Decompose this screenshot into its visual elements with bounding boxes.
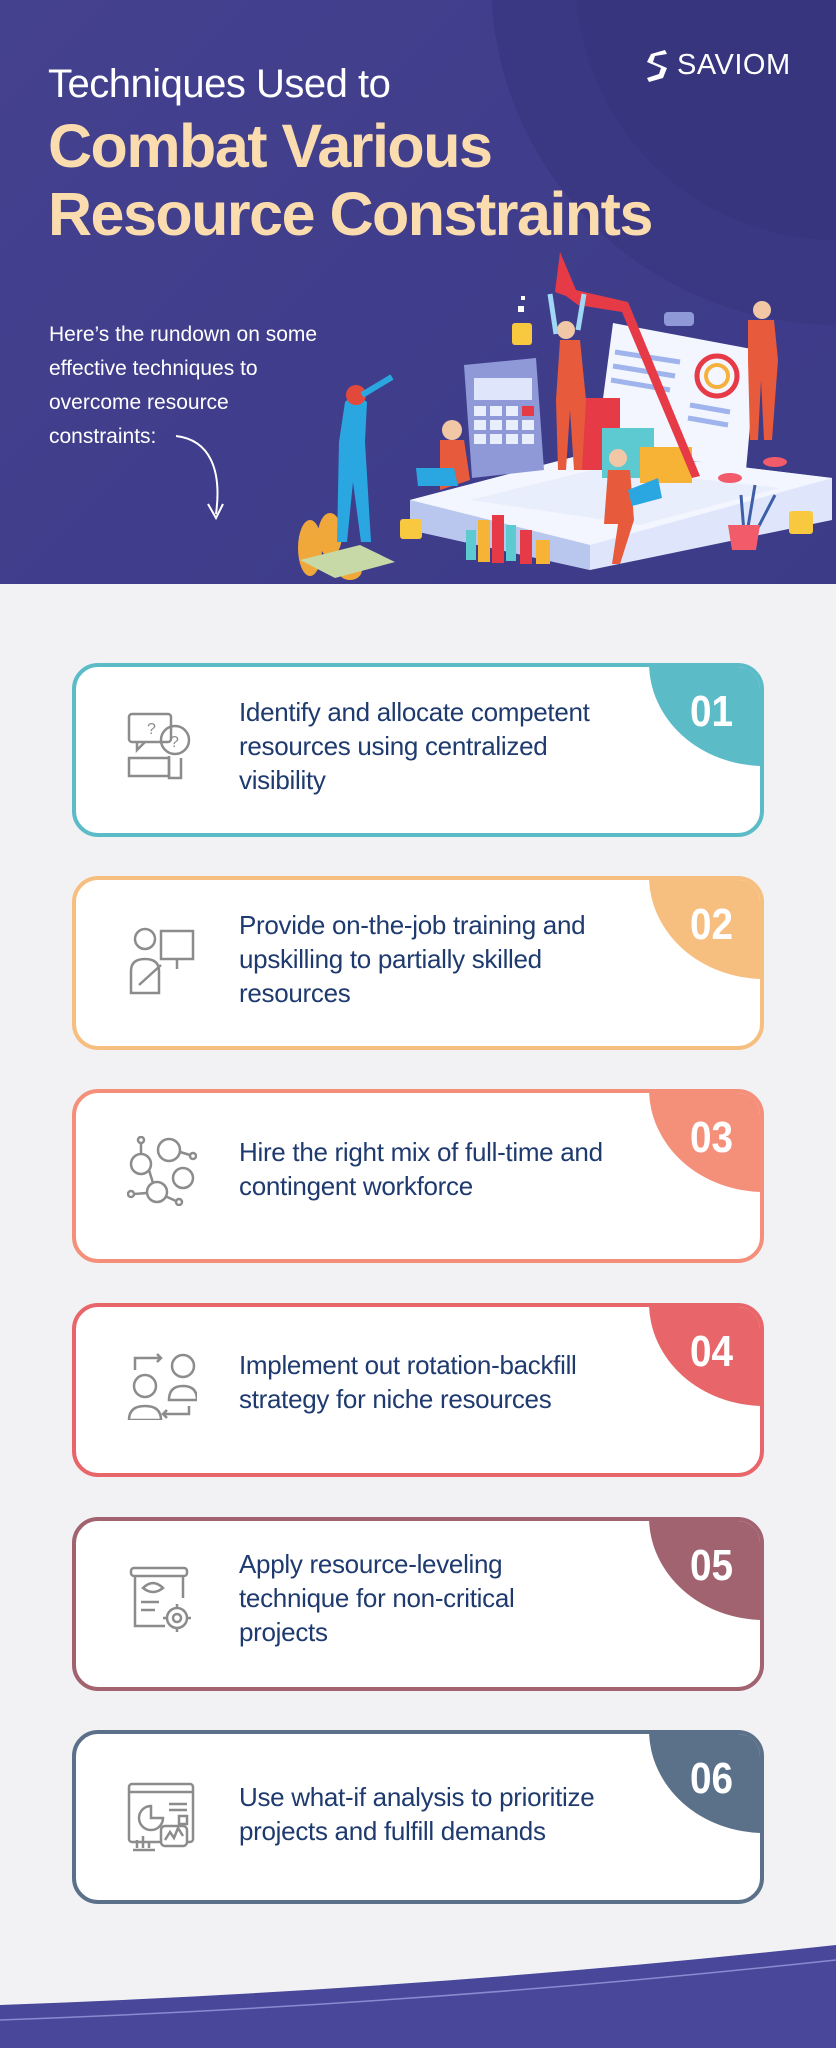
icon: what-if analysis (128, 1782, 194, 1852)
card 05 (72, 1517, 764, 1691)
card 05: projects (239, 1617, 328, 1647)
card 04 (72, 1303, 764, 1477)
card 06: Use what-if analysis to prioritize projects and fulfill demands (239, 1782, 594, 1846)
hero header (0, 0, 836, 584)
card 01 (72, 663, 764, 837)
icon: question search: ? (170, 734, 179, 751)
card 02: Provide on-the-job training and upskilling to partially skilled resources (239, 910, 585, 1008)
illustration (298, 252, 832, 580)
card 01: Identify and allocate competent resources using centralized visibility (239, 697, 590, 795)
icon: trainer (130, 928, 194, 994)
card 04: Implement out rotation-backfill strategy for niche resources (239, 1350, 577, 1414)
card 01: 01 (690, 687, 733, 736)
icon: question search: ? (147, 721, 156, 738)
card 03 (72, 1089, 764, 1263)
title: Techniques Used to (48, 62, 390, 106)
title (48, 62, 652, 248)
card 05: Apply resource-leveling (239, 1549, 502, 1579)
card 02 (72, 876, 764, 1050)
card 03: Hire the right mix of full-time and contingent workforce (239, 1137, 603, 1201)
title: Combat Various (48, 112, 491, 180)
card 02: 02 (690, 900, 733, 949)
card 06 (72, 1730, 764, 1904)
logo: SAVIOM: SAVIOM (677, 49, 791, 81)
footer wave (0, 1945, 836, 2048)
icon: curved arrow (176, 435, 224, 520)
icon: leveling gear (130, 1566, 191, 1632)
card 06: 06 (690, 1754, 733, 1803)
card 05: technique for non-critical (239, 1583, 514, 1613)
icon: network of people (127, 1136, 197, 1206)
card 03: 03 (690, 1113, 733, 1162)
card 05: 05 (690, 1541, 733, 1590)
subtitle text: Here’s the rundown on some effective techniques to overcome resource constraints: (49, 323, 317, 448)
icon: rotation people (128, 1353, 197, 1420)
card 04: 04 (690, 1327, 733, 1376)
icon: question search (128, 712, 190, 780)
title: Resource Constraints (48, 180, 652, 248)
